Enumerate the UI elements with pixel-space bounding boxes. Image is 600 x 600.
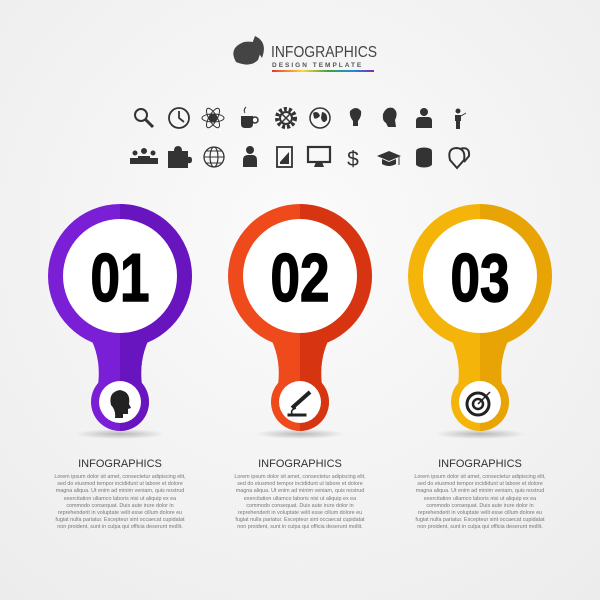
- icon: pen: [288, 392, 310, 416]
- icon: target: [467, 392, 490, 415]
- icon rows: $: [347, 148, 359, 171]
- logo: INFOGRAPHICS: [271, 44, 377, 61]
- icon: head with bulb: [110, 390, 131, 418]
- text: INFOGRAPHICS: [78, 458, 162, 470]
- logo: [233, 36, 377, 72]
- icon rows: [130, 106, 469, 171]
- logo: DESIGN TEMPLATE: [272, 62, 363, 69]
- text: Lorem ipsum dolor sit amet, consectetur adipiscing elit, sed do eiusmod tempor incididunt ut labore et dolore magna aliqua. Ut enim ad minim veniam, quis nostrud exercitation ullamco laboris nisi ut aliquip ex ea commodo consequat. Duis aute irure dolor in reprehenderit in voluptate velit esse cillum dolore eu fugiat nulla pariatur. Excepteur sint occaecat cupidatat non proident, sunt in culpa qui officia deserunt mollit.: [234, 474, 366, 530]
- text block 1: [54, 458, 186, 530]
- text: Lorem ipsum dolor sit amet, consectetur adipiscing elit, sed do eiusmod tempor incididunt ut labore et dolore magna aliqua. Ut enim ad minim veniam, quis nostrud exercitation ullamco laboris nisi ut aliquip ex ea commodo consequat. Duis aute irure dolor in reprehenderit in voluptate velit esse cillum dolore eu fugiat nulla pariatur. Excepteur sint occaecat cupidatat non proident, sunt in culpa qui officia deserunt mollit.: [414, 474, 546, 530]
- pin 1: [48, 204, 192, 439]
- text: INFOGRAPHICS: [258, 458, 342, 470]
- number 02: 02: [271, 240, 329, 315]
- text: INFOGRAPHICS: [438, 458, 522, 470]
- pin 2: [228, 204, 372, 439]
- text block 2: [234, 458, 366, 530]
- pin 3: [408, 204, 552, 439]
- number 01: 01: [91, 240, 149, 315]
- text: Lorem ipsum dolor sit amet, consectetur adipiscing elit, sed do eiusmod tempor incididunt ut labore et dolore magna aliqua. Ut enim ad minim veniam, quis nostrud exercitation ullamco laboris nisi ut aliquip ex ea commodo consequat. Duis aute irure dolor in reprehenderit in voluptate velit esse cillum dolore eu fugiat nulla pariatur. Excepteur sint occaecat cupidatat non proident, sunt in culpa qui officia deserunt mollit.: [54, 474, 186, 530]
- text block 3: [414, 458, 546, 530]
- number 03: 03: [451, 240, 509, 315]
